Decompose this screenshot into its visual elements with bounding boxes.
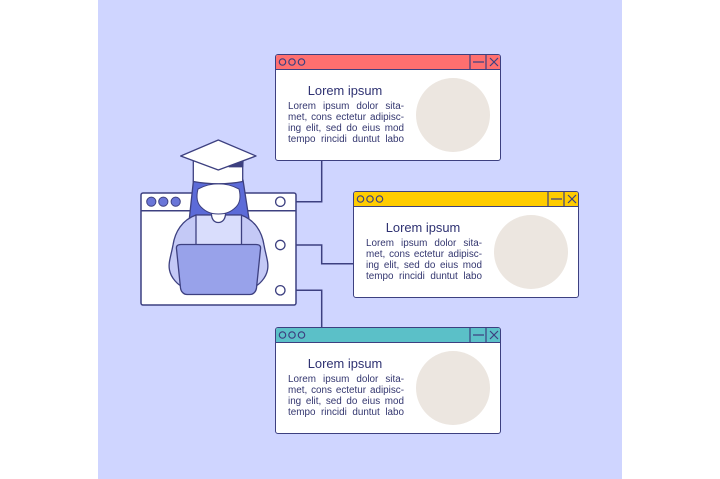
text block: [366, 238, 482, 282]
heading: Lorem ipsum: [308, 83, 382, 98]
text block: Lorem ipsum dolor sita-: [366, 238, 482, 248]
background panel: [98, 0, 622, 479]
panel: top card: [275, 54, 501, 161]
shoulders and arms: [169, 215, 268, 287]
text block: Lorem ipsum dolor sita-: [288, 100, 404, 112]
text block: tempo rincidi duntut labo: [288, 407, 404, 418]
shirt: [196, 215, 242, 247]
face: [197, 184, 240, 214]
text block: tempo rincidi duntut labo: [366, 271, 482, 282]
image placeholder: [416, 78, 490, 152]
text block: ing elit, sed do eius mod: [288, 123, 404, 134]
mortarboard: [181, 140, 256, 170]
connector: bottom card: [285, 290, 322, 327]
text block: tempo rincidi duntut labo: [288, 134, 404, 145]
cap band: [193, 159, 243, 184]
heading: Lorem ipsum: [308, 356, 382, 371]
text block: met, cons ectetur adipisc-: [288, 112, 404, 123]
title bar: yellow: [354, 192, 578, 207]
connector: top card: [285, 161, 322, 202]
cap tip shadow: [229, 162, 243, 167]
heading: Lorem ipsum: [386, 220, 460, 235]
panel: middle card: [353, 191, 579, 298]
browser window: [141, 193, 296, 305]
image placeholder: [416, 350, 490, 424]
laptop: [176, 244, 261, 294]
title bar: red: [276, 55, 500, 70]
text block: Lorem ipsum dolor sita-: [288, 374, 404, 384]
neck: [211, 212, 226, 222]
text block: ing elit, sed do eius mod: [288, 396, 404, 407]
text block: met, cons ectetur adipisc-: [288, 385, 404, 396]
text block: [288, 100, 404, 145]
connector: middle card: [285, 245, 353, 264]
text block: ing elit, sed do eius mod: [366, 260, 482, 271]
image placeholder: [494, 214, 568, 288]
text block: [288, 374, 404, 418]
hair: [189, 180, 249, 219]
text block: met, cons ectetur adipisc-: [366, 249, 482, 260]
title bar: teal: [276, 328, 500, 343]
panel: bottom card: [275, 327, 501, 434]
graduate figure: [169, 140, 268, 294]
